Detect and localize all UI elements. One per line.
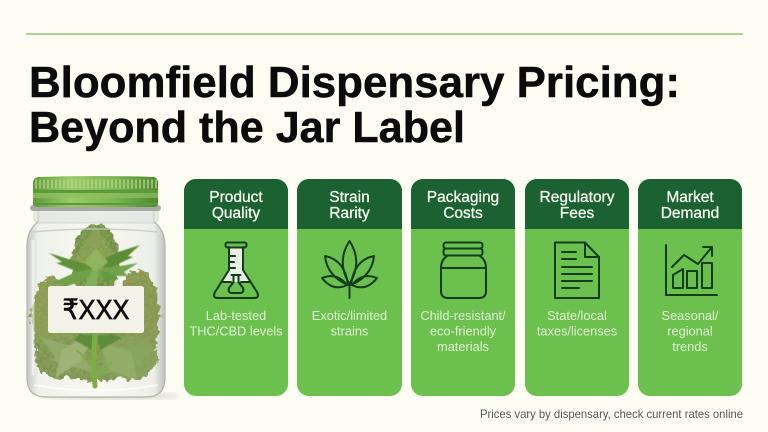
description: regional (667, 324, 713, 338)
title (29, 58, 680, 152)
panel: strain rarity (297, 179, 402, 396)
description: trends (672, 339, 708, 354)
jar illustration (27, 176, 180, 399)
description: strains (331, 324, 368, 338)
glass highlights (32, 240, 34, 375)
description (662, 308, 719, 354)
title: Beyond the Jar Label (29, 103, 465, 152)
title: Bloomfield Dispensary Pricing: (29, 58, 680, 107)
heading: Regulatory (540, 189, 615, 206)
stem (94, 333, 95, 386)
heading: Product (209, 189, 263, 206)
heading: Quality (212, 205, 260, 222)
heading: Strain (329, 189, 370, 206)
panel: product quality (184, 179, 288, 396)
description (312, 308, 387, 338)
description: materials (437, 339, 489, 354)
heading (661, 189, 719, 222)
panel: packaging costs (411, 179, 515, 396)
description: THC/CBD levels (189, 324, 283, 338)
heading (329, 189, 370, 222)
description (189, 308, 283, 338)
description: Seasonal/ (662, 308, 719, 323)
icon: cannabis leaf (322, 241, 377, 298)
heading: Fees (560, 205, 594, 222)
description: Exotic/limited (312, 308, 387, 323)
panel: regulatory fees (525, 179, 629, 396)
cannabis bud (31, 222, 160, 386)
green lid (30, 176, 161, 211)
glass jar body (27, 209, 165, 397)
jar neck (34, 209, 158, 223)
heading (540, 189, 615, 222)
icon: growth chart (666, 245, 717, 295)
description: taxes/licenses (537, 324, 617, 338)
heading: Demand (661, 205, 719, 222)
price label: ₹XXX (62, 294, 130, 325)
description (420, 308, 506, 354)
icon: jar (441, 242, 486, 298)
heading: Costs (443, 205, 483, 222)
leaves (40, 245, 158, 380)
description: State/local (547, 308, 607, 323)
heading: Market (666, 189, 714, 206)
jar shadow (40, 393, 180, 399)
price label (48, 286, 144, 333)
heading: Rarity (329, 205, 370, 222)
heading (427, 189, 499, 222)
description: Child-resistant/ (420, 308, 506, 323)
description (537, 308, 617, 338)
heading (209, 189, 263, 222)
icon: flask (214, 242, 258, 298)
heading: Packaging (427, 189, 499, 206)
footnote: Prices vary by dispensary, check current rates online (480, 407, 743, 421)
panel: market demand (638, 179, 742, 396)
top rule (26, 33, 743, 35)
description: Lab-tested (206, 308, 266, 323)
description: eco-friendly (430, 324, 497, 338)
icon: document (555, 242, 599, 298)
